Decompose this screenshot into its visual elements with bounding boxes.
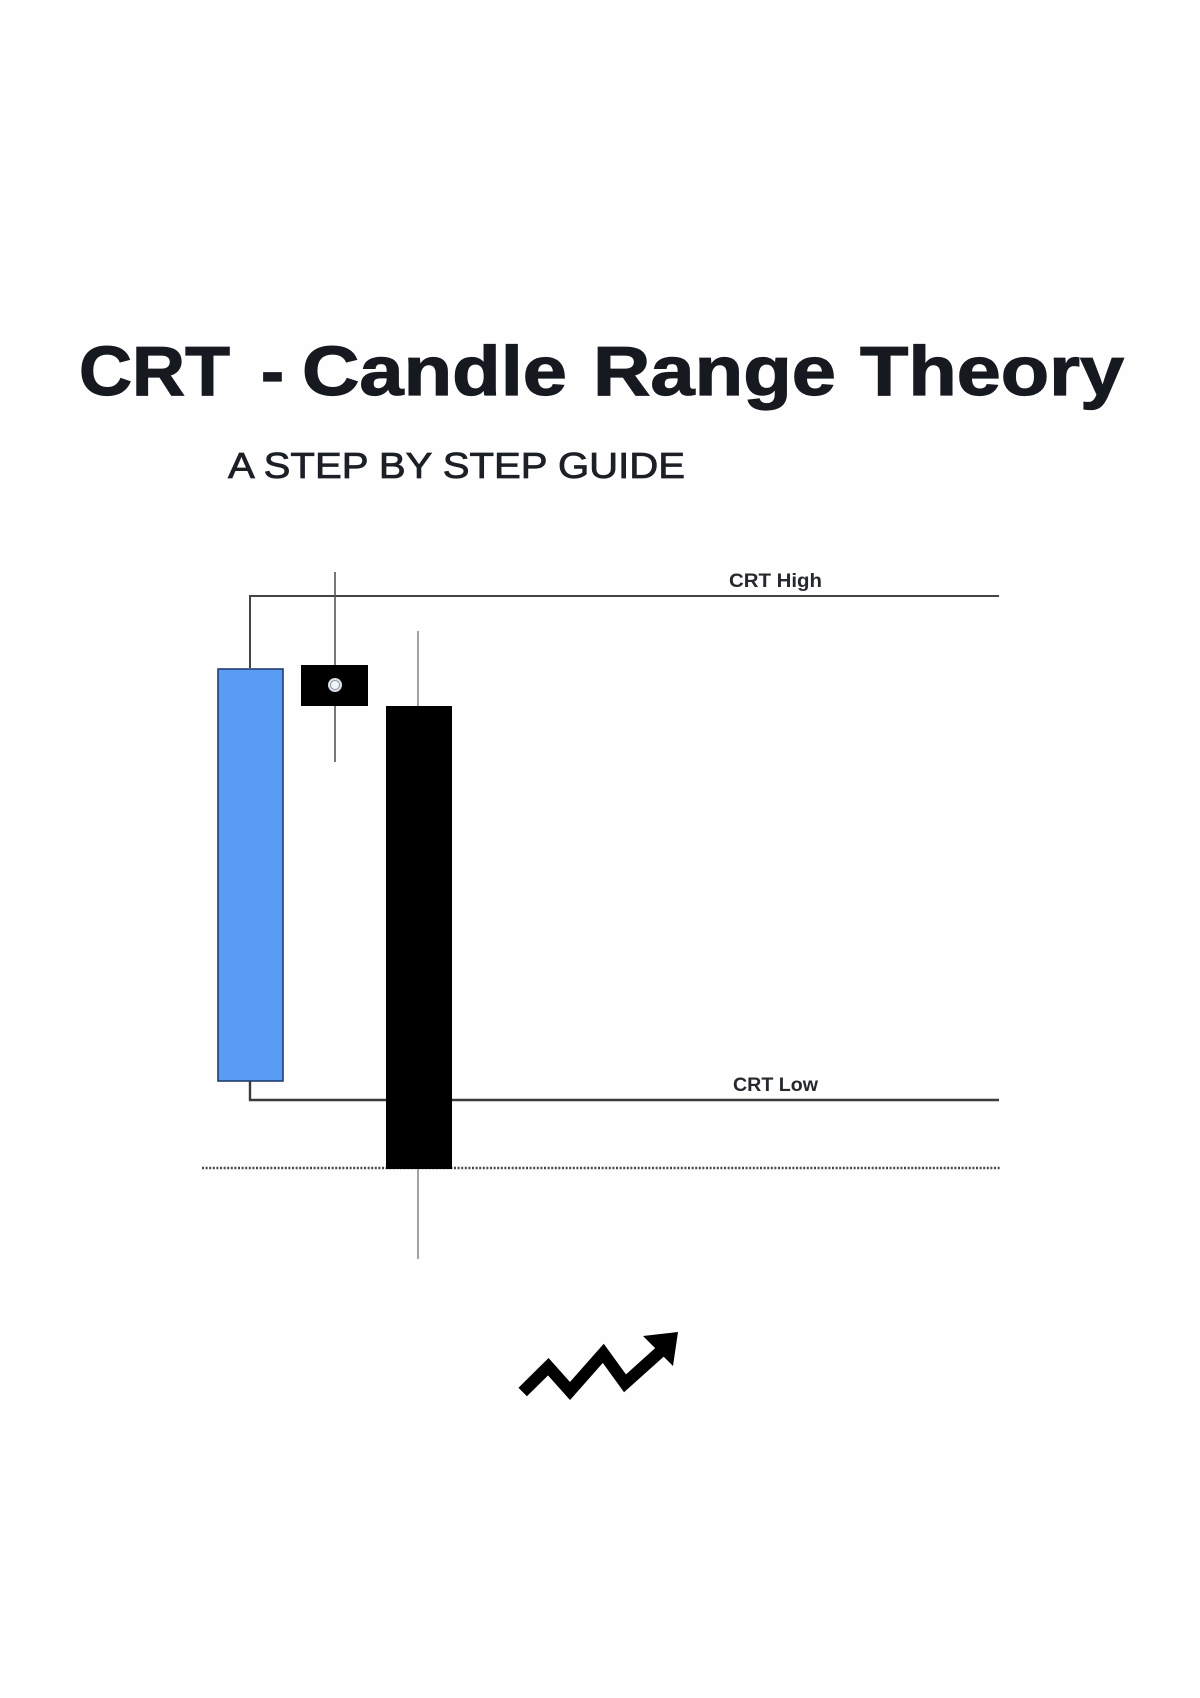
subtitle: A STEP BY STEP GUIDE bbox=[228, 445, 685, 486]
CRT High label: CRT High bbox=[729, 571, 822, 592]
title: Range bbox=[593, 332, 836, 410]
title: Candle bbox=[302, 332, 567, 410]
title: Theory bbox=[860, 332, 1124, 410]
candle marker dot bbox=[328, 678, 342, 692]
icon: rising zigzag arrow bbox=[523, 1332, 678, 1392]
small black candle bbox=[301, 572, 368, 762]
title: CRT bbox=[79, 332, 230, 410]
blue range candle bbox=[218, 669, 283, 1081]
CRT high level line bbox=[250, 596, 999, 668]
CRT Low label: CRT Low bbox=[733, 1075, 818, 1096]
large black sweep candle bbox=[386, 631, 452, 1259]
dotted sweep level line bbox=[202, 1167, 1001, 1169]
CRT low level line bbox=[250, 1081, 999, 1100]
title: - bbox=[261, 332, 284, 410]
title bbox=[79, 332, 1124, 410]
chart: candle range diagram bbox=[202, 571, 1001, 1259]
